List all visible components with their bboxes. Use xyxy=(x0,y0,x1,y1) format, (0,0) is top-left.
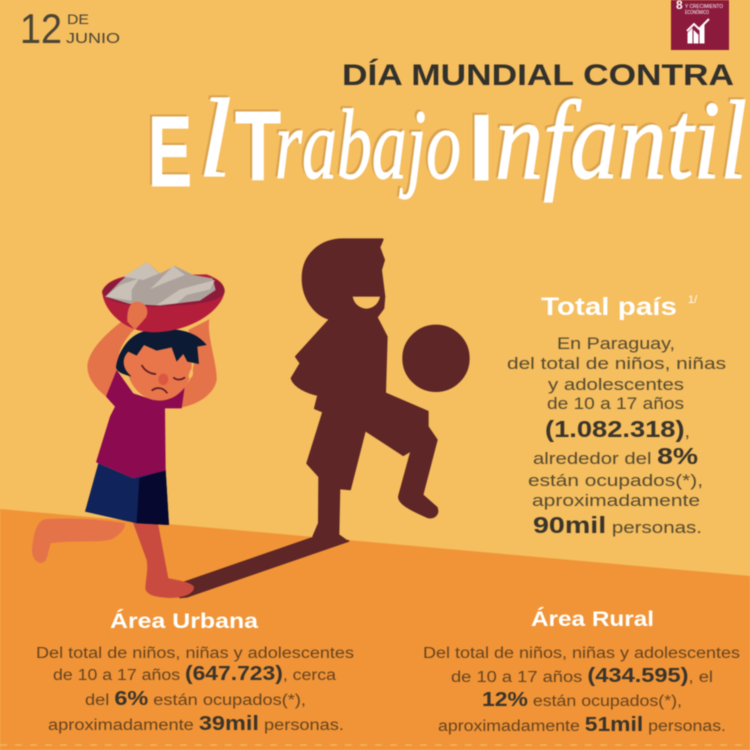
text block: total país: están ocupados(*), xyxy=(528,472,703,490)
back leg xyxy=(32,519,125,563)
heading: Día Mundial contra: DÍA MUNDIAL CONTRA xyxy=(342,58,734,92)
illustration: child carrying bowl of rocks xyxy=(32,262,225,598)
shadow: ball xyxy=(403,326,469,391)
head xyxy=(117,343,192,401)
text block: área urbana: de 10 a 17 años (647.723) , cerca xyxy=(53,663,336,685)
title: El Trabajo Infantil xyxy=(148,77,747,208)
heading: total país: Total país xyxy=(541,293,677,321)
eyes, nose and mouth xyxy=(142,365,185,393)
front hand xyxy=(127,302,147,330)
date: 12 de junio: 12 xyxy=(20,5,62,52)
panel: área rural xyxy=(423,608,740,736)
rocks xyxy=(105,262,216,306)
text block: área urbana: aproximadamente 39mil personas. xyxy=(48,713,344,735)
text block: área urbana xyxy=(36,645,354,735)
panel: total país xyxy=(507,293,726,538)
heading: área rural: Área Rural xyxy=(531,608,654,631)
text block: total país: aproximadamente xyxy=(532,492,700,510)
heading: área urbana: Área Urbana xyxy=(110,610,258,633)
shadow on the ground xyxy=(180,538,348,597)
text block: total país: y adolescentes xyxy=(548,376,684,394)
title: El Trabajo Infantil: l xyxy=(198,77,232,201)
shadow: body and legs xyxy=(292,317,437,541)
text block: área rural: Del total de niños, niñas y adolescentes xyxy=(423,645,740,662)
icon: SDG 8 badge xyxy=(671,0,729,50)
shorts xyxy=(85,463,169,525)
text block: área rural xyxy=(423,645,740,736)
text block: área rural: aproximadamente 51mil personas. xyxy=(438,714,726,736)
bowl xyxy=(102,274,225,332)
title: El Trabajo Infantil: rabajo xyxy=(275,89,461,200)
text block: total país: alrededor del 8% xyxy=(533,443,698,469)
text block: total país: 90mil personas. xyxy=(533,512,702,538)
text block: área urbana: del 6% están ocupados(*), xyxy=(85,688,306,710)
title: El Trabajo Infantil: T xyxy=(235,91,281,201)
right arm xyxy=(180,319,217,408)
shirt xyxy=(96,370,186,478)
shadow: smile xyxy=(353,297,380,309)
date: 12 de junio xyxy=(20,5,120,52)
panel: área urbana xyxy=(36,610,354,735)
date: 12 de junio: DE xyxy=(67,11,89,27)
icon: SDG 8 badge: Y CRECIMIENTO xyxy=(685,4,723,10)
text block: área rural: 12% están ocupados(*), xyxy=(482,689,682,711)
illustration: shadow of child playing with ball xyxy=(180,239,469,597)
text block: total país xyxy=(507,335,726,538)
date: 12 de junio: JUNIO xyxy=(66,30,120,47)
text block: área urbana: Del total de niños, niñas y adolescentes xyxy=(36,645,354,662)
hair xyxy=(116,329,207,377)
text block: total país: de 10 a 17 años xyxy=(547,395,684,413)
ground band xyxy=(0,509,750,750)
front leg xyxy=(133,522,194,598)
left arm xyxy=(87,301,147,398)
text block: total país: (1.082.318) , xyxy=(545,416,690,442)
title: El Trabajo Infantil: E xyxy=(148,96,192,208)
shadow: head xyxy=(303,239,384,319)
text block: total país: En Paraguay, xyxy=(557,335,675,353)
text block: total país: del total de niños, niñas xyxy=(507,355,726,373)
sweat drop xyxy=(189,368,193,378)
footnote mark: 1/ xyxy=(688,294,698,306)
icon: SDG 8 badge: ECONÓMICO xyxy=(685,9,709,16)
title: El Trabajo Infantil: I xyxy=(469,95,494,200)
text block: área rural: de 10 a 17 años (434.595) , el xyxy=(451,665,713,687)
